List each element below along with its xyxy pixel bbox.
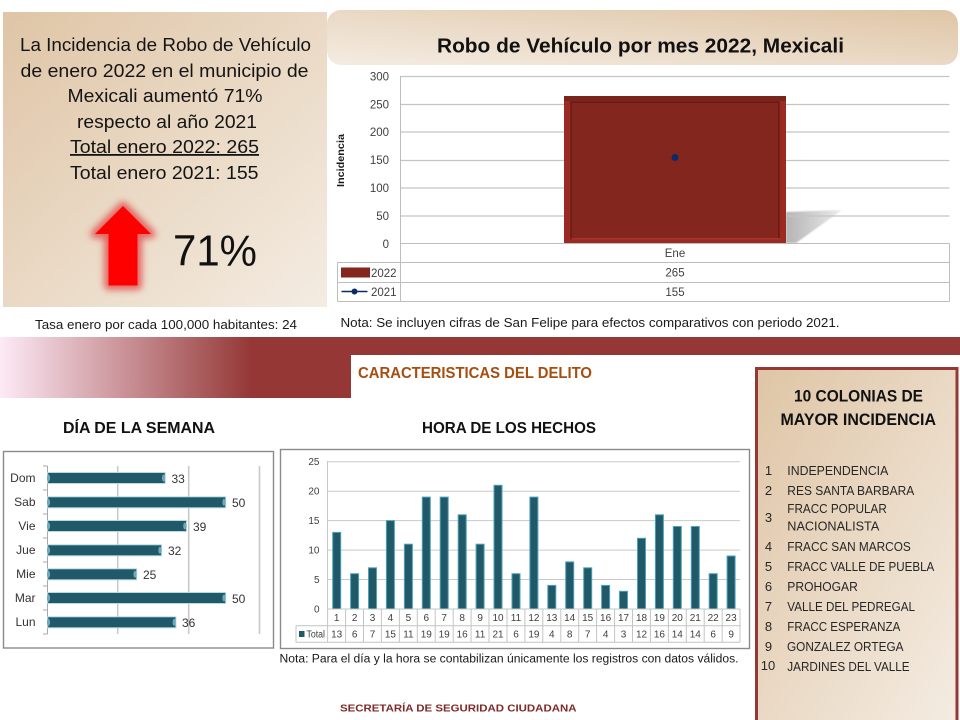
hour y labels: 0	[314, 604, 320, 616]
hour values row: 13	[331, 630, 343, 640]
colonias list: VALLE DEL PEDREGAL	[787, 599, 915, 614]
data table: 265	[665, 268, 685, 280]
y axis title: Incidencia	[335, 134, 347, 187]
colonias list: FRACC VALLE DE PUEBLA	[787, 559, 935, 574]
data table: 155	[665, 287, 685, 299]
day labels: Jue	[16, 543, 36, 557]
y axis labels: 250	[370, 100, 389, 112]
colonias list: FRACC POPULAR	[787, 501, 887, 516]
hour labels row: 20	[672, 613, 683, 624]
footer: SECRETARÍA DE SEGURIDAD CIUDADANA	[340, 702, 577, 714]
colonias heading: 10 COLONIAS DE	[794, 388, 923, 406]
hour labels row: 4	[388, 613, 394, 624]
colonias list: 8	[765, 619, 772, 634]
hour labels row: 3	[370, 613, 376, 624]
hour labels row: 15	[582, 613, 594, 624]
hour values row: 19	[439, 630, 450, 640]
hour values row: 8	[567, 630, 573, 640]
day labels: Sab	[14, 495, 36, 509]
hour values row: 16	[457, 630, 468, 640]
hour labels row: 8	[459, 613, 465, 624]
rate note: Tasa enero por cada 100,000 habitantes: 24	[35, 317, 297, 332]
hour y labels	[308, 457, 320, 616]
summary text: de enero 2022 en el municipio de	[20, 61, 308, 81]
day labels: Mar	[15, 591, 36, 605]
panel: top 10 colonias	[756, 368, 957, 720]
legend 2022: 2022	[371, 268, 397, 280]
day values: 25	[143, 568, 157, 582]
y axis labels	[370, 72, 389, 251]
hour labels row: 5	[406, 613, 412, 624]
colonias list: 9	[765, 639, 772, 654]
colonias list: FRACC ESPERANZA	[787, 619, 901, 634]
colonias list: NACIONALISTA	[787, 518, 880, 534]
section band	[0, 337, 960, 398]
day labels: Mie	[16, 567, 36, 581]
hour labels row: 16	[600, 613, 612, 624]
big percentage: 71%	[173, 226, 257, 276]
icon: red up arrow	[95, 206, 151, 286]
hour values row: 14	[672, 630, 683, 640]
summary text: Total enero 2022: 265	[70, 137, 259, 157]
hour labels row: 12	[528, 613, 540, 624]
y axis labels: 50	[376, 211, 389, 223]
hour values row: 6	[710, 630, 716, 640]
colonias heading	[780, 388, 936, 429]
hour labels row: 6	[424, 613, 430, 624]
data table: Ene	[665, 248, 685, 260]
hour values row: 4	[549, 630, 555, 640]
hour values row: 14	[690, 630, 701, 640]
hour bars	[333, 485, 735, 609]
colonias list: 6	[765, 579, 772, 594]
colonias heading: MAYOR INCIDENCIA	[780, 411, 936, 429]
hour labels row: 21	[690, 613, 701, 624]
hour labels row: 22	[708, 613, 719, 624]
y axis labels: 0	[383, 239, 389, 251]
hour values row: 19	[421, 630, 432, 640]
hour values row: 19	[528, 630, 540, 640]
hour y labels: 10	[308, 546, 320, 556]
panel: summary	[3, 12, 327, 307]
colonias list: 2	[765, 483, 772, 498]
colonias list: 4	[765, 539, 772, 554]
colonias list: 7	[765, 599, 772, 614]
chart: day of week	[4, 452, 274, 648]
hour y labels: 5	[314, 575, 320, 586]
day bar highlights	[47, 474, 226, 626]
hour values row: 9	[728, 630, 734, 640]
heading: hour: HORA DE LOS HECHOS	[422, 420, 596, 437]
hour values row: 11	[403, 630, 414, 640]
summary text: respecto al año 2021	[77, 112, 257, 132]
hour labels row: 10	[492, 613, 504, 624]
hour labels row: 23	[726, 613, 737, 624]
summary text	[20, 35, 311, 183]
y axis labels: 150	[370, 155, 389, 167]
day labels: Vie	[18, 519, 36, 533]
colonias list: FRACC SAN MARCOS	[787, 539, 911, 554]
hour values row: 6	[513, 630, 519, 640]
legend: total: Total	[306, 630, 325, 640]
day values: 50	[232, 496, 246, 510]
day labels: Lun	[15, 615, 36, 629]
hour values row: 11	[475, 630, 486, 640]
chart: monthly bar chart	[335, 72, 950, 302]
hour values row: 7	[370, 630, 376, 640]
colonias list: JARDINES DEL VALLE	[787, 659, 910, 674]
hour values row: 16	[654, 630, 665, 640]
hour labels row: 1	[334, 613, 340, 624]
colonias list: 1	[765, 463, 772, 478]
legend 2021	[342, 287, 397, 299]
hour labels row: 13	[546, 613, 558, 624]
legend 2021: 2021	[371, 287, 397, 299]
hour values row: 7	[585, 630, 591, 640]
data table	[338, 76, 950, 302]
note: valid records: Nota: Para el día y la hora se contabilizan únicamente los registros con datos válidos.	[280, 654, 738, 666]
bar 2022	[564, 96, 786, 244]
panel: monthly chart title	[327, 10, 958, 65]
legend 2022	[341, 268, 397, 280]
day bars	[48, 472, 226, 628]
day values: 39	[193, 520, 207, 534]
hour values row	[331, 630, 734, 640]
hour y labels: 25	[308, 457, 320, 468]
colonias list: 10	[761, 658, 775, 673]
colonias list: 5	[765, 559, 772, 574]
hour labels row	[334, 613, 737, 624]
hour values row: 12	[636, 630, 647, 640]
colonias list	[761, 463, 935, 674]
hour labels row: 18	[636, 613, 647, 624]
day values: 33	[172, 472, 185, 486]
hour data table	[296, 609, 740, 642]
day values	[143, 472, 246, 630]
day values: 50	[232, 592, 246, 606]
hour labels row: 14	[564, 613, 576, 624]
day values: 32	[168, 544, 182, 558]
summary text: Total enero 2021: 155	[70, 163, 258, 183]
y axis labels: 200	[370, 127, 389, 139]
colonias list: GONZALEZ ORTEGA	[787, 639, 904, 654]
hour labels row: 7	[441, 613, 447, 624]
day labels: Dom	[10, 471, 36, 485]
hour values row: 4	[603, 630, 609, 640]
summary text: La Incidencia de Robo de Vehículo	[20, 35, 311, 55]
hour labels row: 19	[654, 613, 665, 624]
day values: 36	[182, 616, 196, 630]
hour values row: 6	[352, 630, 358, 640]
summary text: Mexicali aumentó 71%	[68, 86, 262, 106]
hour labels row: 2	[352, 613, 358, 624]
colonias list: PROHOGAR	[787, 579, 858, 594]
section heading: CARACTERISTICAS DEL DELITO	[358, 365, 592, 382]
hour values row: 15	[385, 630, 396, 640]
bar shadow	[786, 210, 842, 243]
marker 2021	[672, 154, 678, 161]
panel: monthly chart title: Robo de Vehículo por mes 2022, Mexicali	[437, 36, 844, 58]
heading: day of week: DÍA DE LA SEMANA	[63, 418, 215, 437]
colonias list: INDEPENDENCIA	[787, 463, 889, 478]
hour labels row: 9	[477, 613, 483, 624]
chart: hour of events	[280, 450, 750, 648]
hour labels row: 11	[511, 613, 522, 624]
hour y labels: 15	[308, 516, 320, 527]
y axis labels: 300	[370, 72, 389, 84]
monthly chart note: Nota: Se incluyen cifras de San Felipe para efectos comparativos con periodo 2021.	[340, 315, 840, 330]
hour labels row: 17	[618, 613, 629, 624]
hour values row: 3	[621, 630, 627, 640]
legend: total	[299, 630, 325, 640]
day labels	[10, 471, 36, 629]
hour y labels: 20	[308, 486, 320, 498]
colonias list: 3	[765, 510, 772, 525]
y axis labels: 100	[370, 183, 389, 195]
hour values row: 21	[492, 630, 504, 640]
colonias list: RES SANTA BARBARA	[787, 483, 915, 498]
